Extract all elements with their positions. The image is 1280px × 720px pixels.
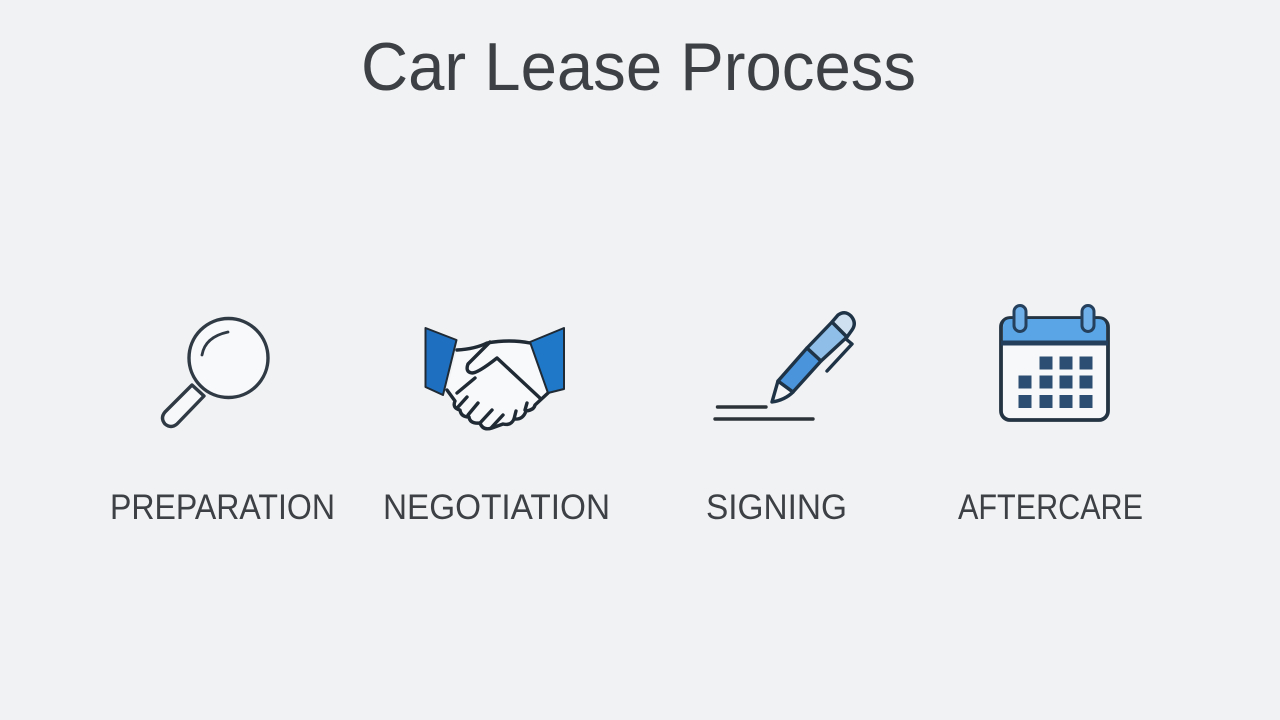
left cuff <box>426 328 456 395</box>
icon: pen signing a line <box>715 313 854 419</box>
label: aftercare: AFTERCARE <box>958 488 1143 527</box>
icon: calendar <box>1001 306 1108 420</box>
calendar rings <box>1014 306 1094 332</box>
label: signing: SIGNING <box>706 488 847 527</box>
icon: magnifying glass <box>162 318 268 426</box>
title: Car Lease Process <box>361 29 916 105</box>
label: negotiation: NEGOTIATION <box>383 488 610 527</box>
label: preparation: PREPARATION <box>110 488 335 527</box>
calendar day grid <box>1018 356 1092 408</box>
icon: handshake <box>426 328 564 429</box>
right cuff <box>530 328 564 393</box>
